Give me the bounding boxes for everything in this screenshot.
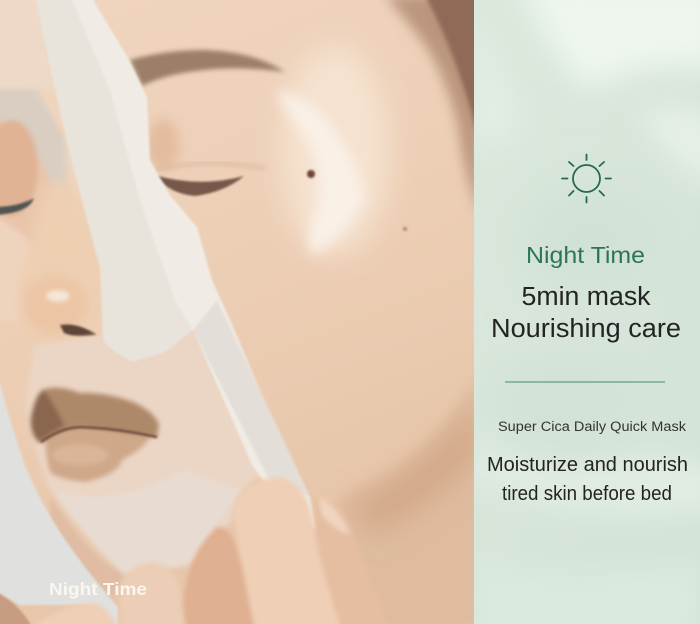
closed eye: [154, 175, 244, 196]
description text: tired skin before bed: [502, 483, 672, 505]
finger: middle shadowed: [182, 527, 262, 624]
nose: [18, 179, 97, 338]
finger: lower left tip: [28, 603, 118, 624]
heading: 5min mask Nourishing care: Nourishing care: [491, 315, 681, 343]
left lower mask: [0, 372, 118, 624]
finger: pinching: [233, 477, 342, 624]
panel: right text background: [474, 0, 700, 624]
hair: [385, 0, 480, 215]
moles: [307, 170, 407, 231]
left eye: [0, 198, 34, 215]
finger: left: [120, 562, 186, 624]
upper mask strip: [35, 0, 316, 530]
description text: Moisturize and nourish: [487, 454, 688, 476]
finger: nail side: [313, 513, 338, 604]
photo: face with sheet mask: [0, 0, 480, 624]
eyebrow: [130, 50, 285, 86]
heading: 5min mask Nourishing care: 5min mask: [522, 283, 651, 311]
eyelid shadow: [147, 119, 179, 171]
heading: 5min mask Nourishing care: [491, 283, 681, 343]
lower mask: [25, 330, 262, 597]
translucent veil over left eye: [0, 0, 67, 236]
fingers: [38, 476, 350, 624]
lips: [31, 388, 159, 482]
icon: sun: [562, 154, 611, 202]
lip line: [41, 427, 157, 442]
divider line: [505, 382, 665, 383]
neck shadow: [344, 387, 474, 624]
heading: Night Time: Night Time: [526, 242, 645, 268]
description text: [487, 454, 688, 505]
cheek shine: [280, 45, 390, 255]
product name: Super Cica Daily Quick Mask: [498, 419, 686, 434]
photo caption: Night Time: Night Time: [49, 579, 147, 599]
upper lip: [31, 388, 159, 443]
lower lip: [45, 425, 155, 482]
